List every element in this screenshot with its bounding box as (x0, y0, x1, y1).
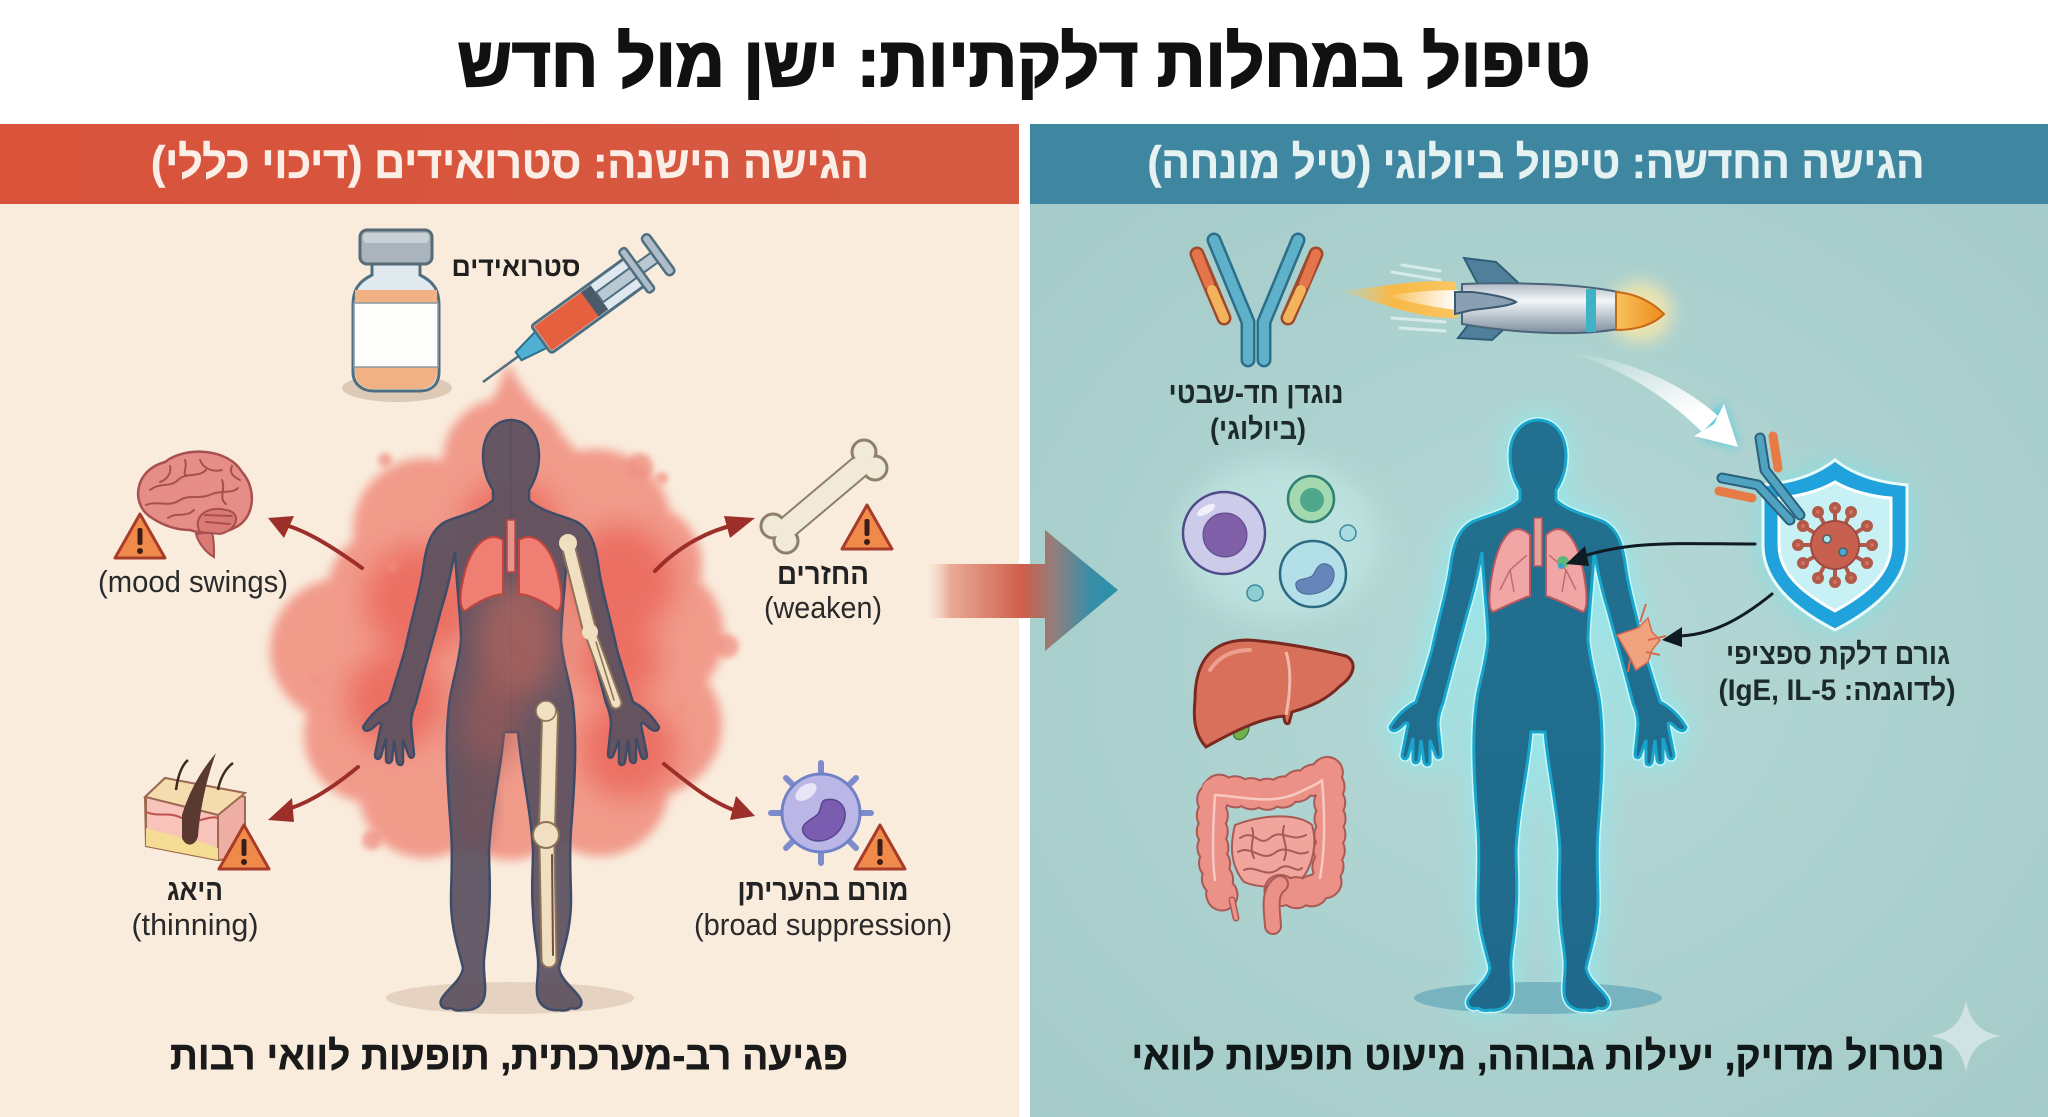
panel: new approach (1030, 124, 2048, 1117)
icon: warning bone (842, 505, 892, 549)
caption: new approach: נטרול מדויק, יעילות גבוהה, מיעוט תופעות לוואי (1132, 1034, 1944, 1078)
lungs (461, 520, 561, 611)
icon: bone (760, 439, 888, 554)
icon: protective shield with virus (1763, 460, 1907, 630)
arm bones (559, 534, 616, 703)
label: weaken: (weaken) (764, 590, 882, 625)
label: broad suppression: (broad suppression) (694, 907, 952, 942)
icon: warning brain (115, 514, 165, 558)
red inflammation cloud (270, 362, 739, 860)
caption: old approach: פגיעה רב-מערכתית, תופעות לוואי רבות (170, 1034, 848, 1078)
icon: steroid vial (342, 230, 452, 402)
icon: inflamed spot on arm (1617, 604, 1666, 672)
label: mood swings: (mood swings) (98, 564, 288, 599)
label: example targets: (לדוגמה: IgE, IL-5) (1718, 674, 1956, 707)
icon: antibody (1197, 240, 1316, 360)
label: immune: מורם בהעריתן (738, 874, 908, 907)
icon: guided missile (1337, 258, 1672, 342)
arrow: old to new (927, 530, 1118, 651)
arrow: white curved arrow to target (1566, 352, 1738, 448)
icon: syringe (468, 231, 677, 403)
arrow: shield to inflamed arm (1662, 594, 1772, 647)
label: specific inflammation factor: גורם דלקת ספציפי (1726, 638, 1950, 671)
body: old approach (363, 420, 659, 1011)
label: monoclonal antibody: נוגדן חד-שבטי (1168, 377, 1344, 410)
icon: immune cells (1180, 460, 1380, 620)
icon: skin with hair (145, 753, 245, 860)
icon: intestines (1212, 772, 1330, 926)
label: skin: היאג (167, 874, 223, 907)
virus (1794, 504, 1876, 586)
arrow: shield to lung (1566, 544, 1755, 566)
icon: sparkle watermark (1931, 1000, 2001, 1072)
label: biologic: (ביולוגי) (1210, 413, 1306, 446)
target in lung (1557, 556, 1569, 569)
heading: old approach: הגישה הישנה: סטרואידים (דיכוי כללי) (151, 137, 869, 188)
panel background: new approach (1030, 204, 2048, 1117)
icon: warning cell (855, 825, 905, 869)
panel: old approach (0, 124, 1019, 1117)
icon: warning skin (219, 825, 269, 869)
heading: new approach: הגישה החדשה: טיפול ביולוגי (טיל מונחה) (1148, 137, 1924, 188)
label: steroids: סטרואידים (452, 252, 580, 282)
body: new approach (1390, 420, 1686, 1011)
icon: antibody on shield (1719, 436, 1800, 520)
lungs (1489, 518, 1587, 612)
icon: brain (138, 452, 252, 557)
panel background: old approach (0, 204, 1019, 1117)
floor shadow: right body (1414, 982, 1662, 1014)
header band: old approach (0, 124, 1019, 204)
label: bones: החזרים (777, 558, 869, 591)
glow: right body (1390, 420, 1686, 1011)
icon: liver (1194, 640, 1353, 747)
icon: immune cell (771, 763, 871, 863)
title: טיפול במחלות דלקתיות: ישן מול חדש (458, 23, 1590, 101)
header band: new approach (1030, 124, 2048, 204)
label: thinning: (thinning) (132, 907, 258, 942)
leg bones (533, 701, 559, 960)
floor shadow: left body (386, 982, 634, 1014)
arrows: side effects (268, 516, 755, 822)
